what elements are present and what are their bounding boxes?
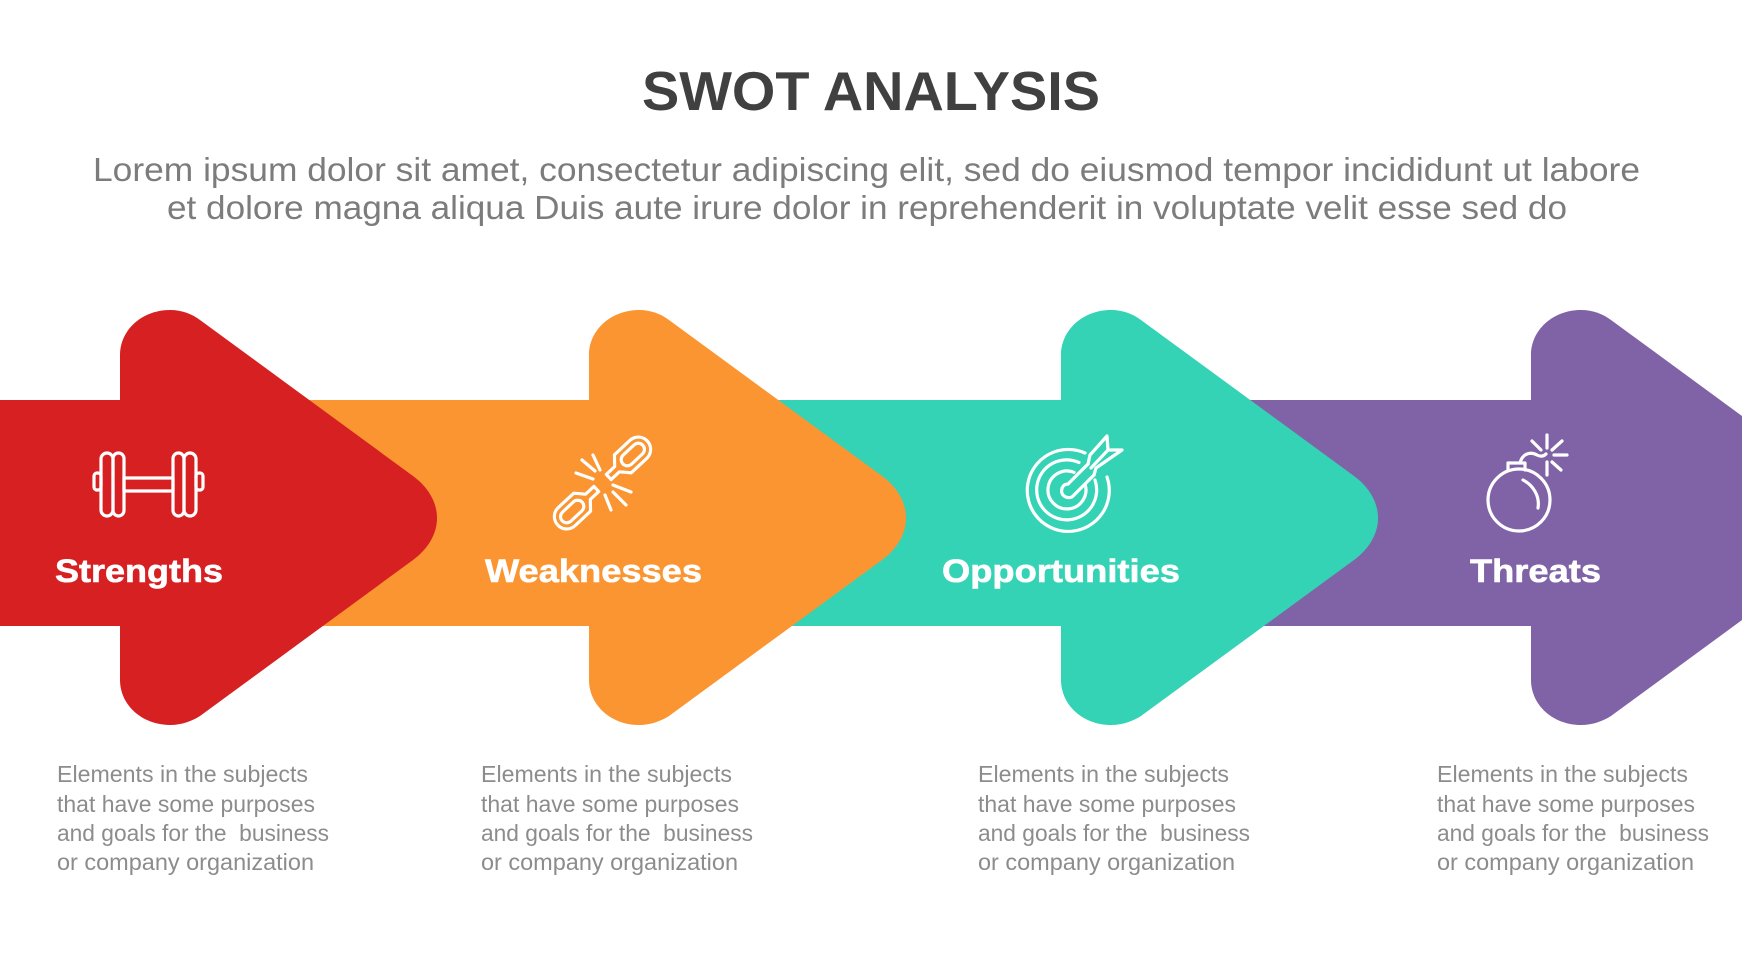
description: opportunities: and goals for the business [978, 820, 1250, 846]
panel: opportunities [760, 310, 1378, 875]
description: threats: and goals for the business [1437, 820, 1709, 846]
arrow: opportunities [1061, 310, 1378, 725]
arrow: weaknesses [589, 310, 906, 725]
title: SWOT ANALYSIS [642, 60, 1100, 122]
icon: broken chain [549, 432, 656, 534]
band: strengths [0, 400, 140, 626]
band: threats [1230, 400, 1550, 626]
description: strengths: that have some purposes [57, 791, 315, 817]
panel: weaknesses [290, 310, 906, 875]
label: opportunities: Opportunities [942, 553, 1180, 589]
description: weaknesses: and goals for the business [481, 820, 753, 846]
description: threats [1437, 761, 1709, 875]
band: weaknesses [290, 400, 610, 626]
panel: threats [1230, 310, 1742, 875]
label: threats: Threats [1470, 553, 1601, 589]
description: threats: or company organization [1437, 849, 1694, 875]
arrow: strengths [120, 310, 437, 725]
label: strengths: Strengths [55, 553, 223, 589]
icon: dumbbell [94, 453, 203, 516]
subtitle [93, 151, 1640, 226]
description: strengths: and goals for the business [57, 820, 329, 846]
arrow: threats [1531, 310, 1742, 725]
icon: bomb [1488, 435, 1567, 531]
panel: strengths [0, 310, 437, 875]
description: threats: Elements in the subjects [1437, 761, 1688, 787]
description: weaknesses [481, 761, 753, 875]
description: weaknesses: that have some purposes [481, 791, 739, 817]
description: opportunities: or company organization [978, 849, 1235, 875]
description: strengths: Elements in the subjects [57, 761, 308, 787]
description: strengths [57, 761, 329, 875]
description: opportunities [978, 761, 1250, 875]
description: strengths: or company organization [57, 849, 314, 875]
description: opportunities: that have some purposes [978, 791, 1236, 817]
label: weaknesses: Weaknesses [485, 553, 702, 589]
description: weaknesses: Elements in the subjects [481, 761, 732, 787]
description: threats: that have some purposes [1437, 791, 1695, 817]
subtitle: et dolore magna aliqua Duis aute irure dolor in reprehenderit in voluptate velit esse sed do [167, 189, 1567, 226]
icon: target [1027, 436, 1122, 531]
description: weaknesses: or company organization [481, 849, 738, 875]
band: opportunities [760, 400, 1080, 626]
description: opportunities: Elements in the subjects [978, 761, 1229, 787]
subtitle: Lorem ipsum dolor sit amet, consectetur adipiscing elit, sed do eiusmod tempor incididunt ut labore [93, 151, 1640, 188]
